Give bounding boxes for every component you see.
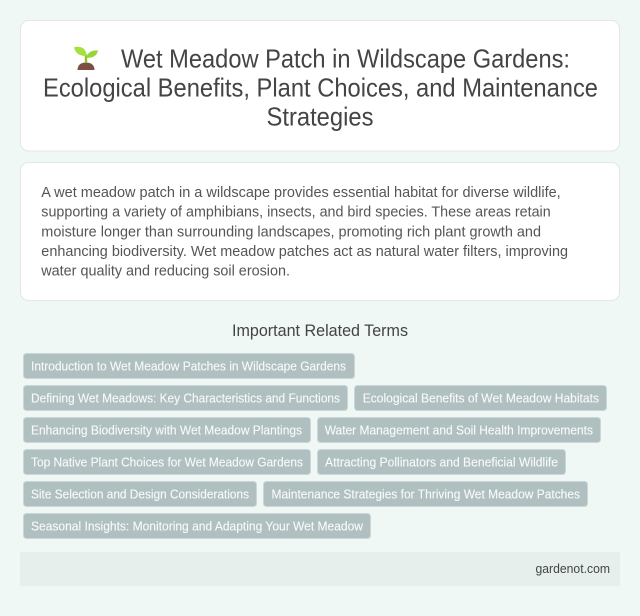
panel: title card: [20, 20, 620, 151]
title: Strategies: [266, 102, 374, 132]
chip: ecological benefits: Ecological Benefits of Wet Meadow Habitats: [363, 392, 599, 406]
title: Wet Meadow Patch in Wildscape Gardens:: [121, 44, 570, 74]
description text: moisture longer than surrounding landscapes, promoting rich plant growth and: [41, 224, 541, 240]
icon: sprout: [74, 47, 98, 70]
title: [43, 44, 598, 132]
description text: A wet meadow patch in a wildscape provides essential habitat for diverse wildlife,: [41, 185, 561, 201]
chip: native plants: Top Native Plant Choices for Wet Meadow Gardens: [31, 456, 303, 470]
chip: biodiversity: Enhancing Biodiversity with Wet Meadow Plantings: [31, 424, 302, 438]
chip: maintenance: Maintenance Strategies for Thriving Wet Meadow Patches: [272, 488, 580, 502]
chip: pollinators: Attracting Pollinators and Beneficial Wildlife: [325, 456, 558, 470]
chip: defining: Defining Wet Meadows: Key Characteristics and Functions: [31, 392, 340, 406]
description text: supporting a variety of amphibians, insects, and bird species. These areas retain: [41, 204, 551, 220]
heading: related terms: Important Related Terms: [232, 321, 408, 340]
title: Ecological Benefits, Plant Choices, and Maintenance: [43, 72, 598, 102]
chip: defining: [24, 386, 348, 410]
chip: introduction: [24, 354, 354, 378]
description text: water quality and reducing soil erosion.: [40, 264, 290, 280]
chip: seasonal insights: [24, 514, 370, 538]
chip: pollinators: [318, 450, 566, 474]
chip: introduction: Introduction to Wet Meadow Patches in Wildscape Gardens: [31, 360, 346, 374]
panel: description card: [20, 162, 620, 300]
chip: ecological benefits: [354, 386, 606, 410]
panel: related term chips: [24, 354, 606, 538]
footer source text: gardenot.com: [536, 561, 610, 576]
chip: site selection: [24, 482, 256, 506]
chip: maintenance: [264, 482, 588, 506]
chip: water management: Water Management and Soil Health Improvements: [325, 424, 593, 438]
chip: seasonal insights: Seasonal Insights: Monitoring and Adapting Your Wet Meadow: [31, 520, 364, 534]
chip: site selection: Site Selection and Design Considerations: [31, 488, 249, 502]
description text: enhancing biodiversity. Wet meadow patches act as natural water filters, improving: [41, 244, 568, 260]
chip: biodiversity: [24, 418, 310, 442]
footer: [20, 552, 620, 586]
chip: water management: [318, 418, 600, 442]
chip: native plants: [24, 450, 310, 474]
description text: [40, 185, 568, 280]
